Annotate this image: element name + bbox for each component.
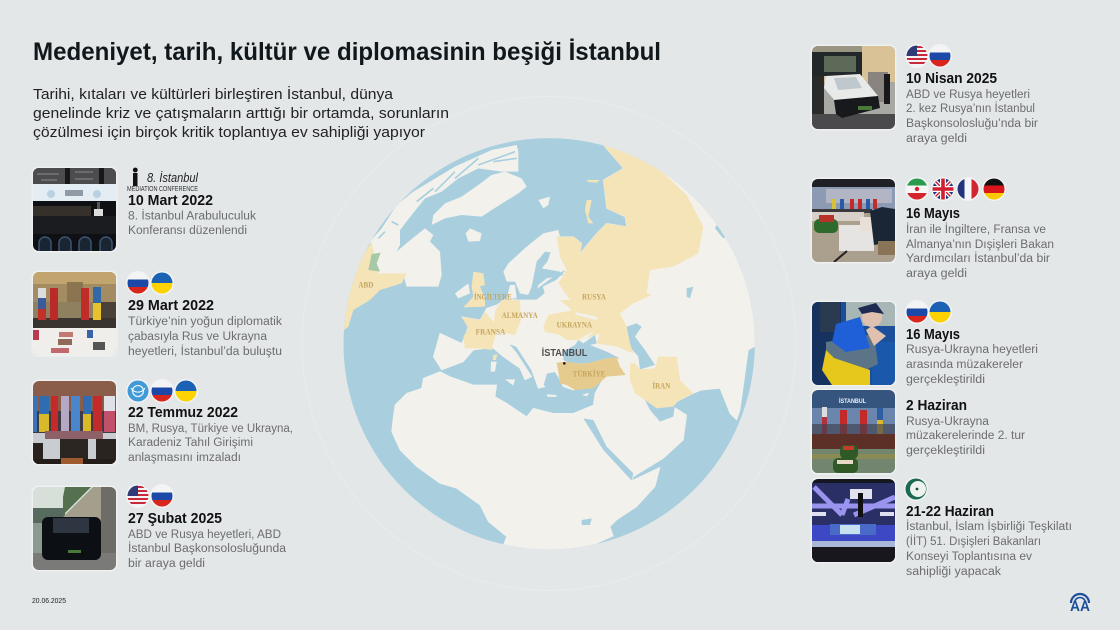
- description: [906, 416, 1025, 457]
- description: 2. kez Rusya’nın İstanbul: [906, 102, 1035, 115]
- description: [906, 520, 1072, 578]
- Iceland: [466, 228, 482, 242]
- date: 27 Şubat 2025: [128, 511, 222, 527]
- title: Medeniyet, tarih, kültür ve diplomasinin beşiği İstanbul: [33, 38, 661, 66]
- photo: Dolmabahçe talks: [32, 270, 118, 356]
- description: [128, 423, 293, 464]
- flags: [126, 379, 198, 403]
- photo: white van: [810, 44, 896, 130]
- description: [906, 344, 1038, 386]
- description: Türkiye’nin yoğun diplomatik: [128, 316, 282, 328]
- photo: second round talks: [810, 388, 896, 474]
- description: 8. İstanbul Arabuluculuk: [128, 210, 256, 222]
- description: Rusya-Ukrayna heyetleri: [906, 344, 1038, 356]
- event: 2 Haziran: [810, 388, 1025, 474]
- event: 22 Temmuz 2022: [32, 379, 293, 466]
- Scandinavia: [503, 230, 565, 295]
- Greenland: [432, 172, 527, 225]
- event: 29 Mart 2022: [32, 270, 282, 358]
- description: ABD ve Rusya heyetleri, ABD: [128, 529, 281, 541]
- date stamp: 20.06.2025: [32, 598, 66, 605]
- event: 16 Mayıs (Russia-Ukraine): [810, 300, 1038, 386]
- map labels: ABD: [358, 281, 374, 290]
- description: BM, Rusya, Türkiye ve Ukrayna,: [128, 423, 293, 435]
- flags: [126, 484, 174, 508]
- map labels: İRAN: [652, 380, 671, 390]
- highlighted: UK: [463, 272, 485, 307]
- intro paragraph: [33, 85, 449, 141]
- photo: OIC hall: [810, 478, 896, 564]
- Svalbard: [538, 197, 550, 208]
- highlighted: Türkiye: [557, 357, 626, 390]
- description: Yardımcıları İstanbul’da bir: [906, 252, 1050, 265]
- description: [906, 89, 1038, 145]
- map labels: ALMANYA: [502, 311, 538, 320]
- date: 2 Haziran: [906, 398, 967, 414]
- Arctic Canada and Labrador: [370, 145, 518, 287]
- map labels: FRANSA: [476, 327, 506, 336]
- logo: Istanbul Mediation Conference: 8. İstanbul: [147, 170, 199, 185]
- description: sahipliği yapacak: [906, 566, 1001, 578]
- highlighted: Iran: [630, 357, 693, 408]
- description: [906, 223, 1054, 280]
- photo: second round talks: İSTANBUL: [839, 398, 866, 405]
- flags: [126, 271, 174, 295]
- Mediterranean islands: [491, 362, 589, 397]
- description: araya geldi: [906, 133, 967, 145]
- description: (İİT) 51. Dışişleri Bakanları: [906, 535, 1041, 548]
- event: 10 Mart 2022: [32, 166, 256, 252]
- description: anlaşmasını imzaladı: [128, 452, 241, 464]
- highlighted: Russia: [557, 145, 703, 353]
- description: İran ile İngiltere, Fransa ve: [906, 223, 1046, 236]
- description: gerçekleştirildi: [906, 374, 985, 386]
- description: [128, 316, 282, 358]
- description: [128, 210, 256, 237]
- date: 16 Mayıs: [906, 327, 960, 343]
- description: müzakerelerinde 2. tur: [906, 430, 1025, 442]
- date: 10 Mart 2022: [128, 193, 213, 209]
- land masses: [340, 145, 760, 553]
- highlighted: Germany: [493, 300, 521, 335]
- date: 21-22 Haziran: [906, 504, 994, 520]
- highlighted: USA: [340, 242, 407, 333]
- flags: [905, 300, 952, 324]
- seas: [563, 335, 620, 363]
- description: Almanya’nın Dışişleri Bakan: [906, 239, 1054, 251]
- logo: Istanbul Mediation Conference: MEDIATION CONFERENCE: [127, 186, 198, 193]
- photo: embrace with flag: [810, 300, 896, 386]
- globe map: [340, 138, 760, 553]
- description: İstanbul Başkonsolosluğunda: [128, 542, 287, 555]
- description: bir araya geldi: [128, 558, 205, 570]
- flags: [905, 177, 1006, 201]
- intro paragraph: genelinde kriz ve çatışmaların arttığı bir ortamda, sorunların: [33, 105, 449, 122]
- description: Rusya-Ukrayna: [906, 416, 990, 428]
- photo: conference: [32, 166, 118, 252]
- description: Başkonsolosluğu’nda bir: [906, 118, 1038, 130]
- flags: [905, 44, 952, 68]
- map labels: TÜRKİYE: [573, 369, 605, 379]
- description: çabasıyla Rus ve Ukrayna: [128, 331, 268, 343]
- description: Konseyi Toplantısına ev: [906, 551, 1032, 563]
- photo: black van: [32, 486, 118, 572]
- highlighted: Ukraine: [543, 310, 599, 340]
- date: 10 Nisan 2025: [906, 71, 997, 87]
- description: arasında müzakereler: [906, 359, 1023, 371]
- event: 10 Nisan 2025: [810, 44, 1038, 145]
- description: Konferansı düzenlendi: [128, 225, 247, 237]
- logo: AA: AA: [1070, 598, 1090, 615]
- map labels: [358, 281, 671, 390]
- map labels: RUSYA: [582, 292, 606, 301]
- photo: delegation meeting: [810, 178, 896, 264]
- intro paragraph: Tarihi, kıtaları ve kültürleri birleştiren İstanbul, dünya: [33, 85, 394, 103]
- map labels: UKRAYNA: [557, 321, 592, 330]
- Ireland: [455, 283, 470, 298]
- flag: OIC: [904, 477, 928, 501]
- map labels: İSTANBUL: [542, 348, 587, 359]
- description: Karadeniz Tahıl Girişimi: [128, 437, 253, 449]
- description: araya geldi: [906, 268, 967, 280]
- map labels: İNGİLTERE: [474, 291, 512, 301]
- highlighted: France: [462, 312, 497, 350]
- description: [128, 529, 287, 570]
- intro paragraph: çözülmesi için birçok kritik toplantıya ev sahipliği yapıyor: [33, 124, 425, 141]
- date: 22 Temmuz 2022: [128, 405, 238, 421]
- event: 16 Mayıs (Iran): [810, 177, 1054, 280]
- event: 27 Şubat 2025: [32, 484, 287, 572]
- date: 16 Mayıs: [906, 206, 960, 222]
- description: ABD ve Rusya heyetleri: [906, 89, 1030, 101]
- date: 29 Mart 2022: [128, 298, 214, 314]
- logo: Istanbul Mediation Conference: [127, 168, 199, 193]
- ocean: [343, 138, 755, 549]
- description: İstanbul, İslam İşbirliği Teşkilatı: [906, 520, 1072, 533]
- photo: grain deal signing: [32, 380, 118, 466]
- event: 21-22 Haziran: [810, 477, 1072, 578]
- description: heyetleri, İstanbul’da buluştu: [128, 345, 282, 358]
- decorative ring: [302, 96, 796, 590]
- description: gerçekleştirildi: [906, 445, 985, 457]
